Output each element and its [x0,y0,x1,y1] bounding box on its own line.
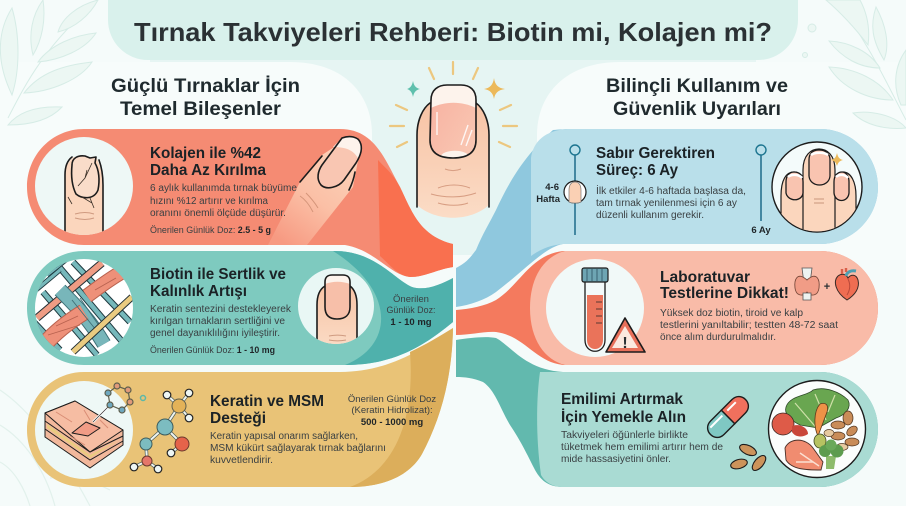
panel: collagen band [27,129,453,277]
band: dose: (Keratin Hidrolizat): [351,405,433,416]
panel: biotin band [27,251,453,365]
band: side dose: Önerilen [393,294,429,305]
icon: test tube [582,268,608,351]
nail [430,85,476,158]
panel: lab band: Testlerine Dikkat! [660,285,789,302]
band: dose: Önerilen Günlük Doz: 1 - 10 mg [150,345,275,356]
band: body: İlk etkiler 4-6 haftada başlasa da, [596,184,746,197]
panel: lab band [456,251,878,365]
panel: food band: mide hassasiyetini önler. [561,454,671,465]
panel: collagen band: hızını %12 artırır ve kırılma [150,196,268,207]
icon: warning triangle: ! [622,335,628,352]
panel: patience band: tam tırnak yenilenmesi için 6 ay [596,198,737,209]
timeline label: 4-6 weeks: 4-6 [545,182,559,193]
panel: keratin band: MSM kükürt sağlayarak tırnak bağlarını [210,443,386,454]
icon: food plate [768,380,866,478]
panel: keratin band [27,328,453,487]
decorative leaves top left [0,0,98,125]
nuts [824,411,859,450]
icon: molecule [130,389,193,473]
panel: keratin band: Desteği [210,410,266,427]
icon: almonds [730,442,768,473]
heading: right column: Bilinçli Kullanım ve [606,76,788,97]
band: dose: Önerilen Günlük Doz [348,394,436,405]
panel: food band: tüketmek hem emilimi artırır hem de [561,442,723,453]
band: body: Takviyeleri öğünlerle birlikte [561,430,688,441]
avocado [814,434,826,448]
timeline: second marker [751,145,771,236]
carrot [815,403,828,436]
greens [786,389,849,428]
panel: biotin band: Kalınlık Artışı [150,283,247,300]
band: dose [348,394,436,428]
finger [417,103,489,218]
band: side dose: Günlük Doz: [386,305,436,316]
heading: left column: Güçlü Tırnaklar İçin [111,76,300,97]
icon: cracked nail [65,156,103,240]
band: body: Keratin sentezini destekleyerek [150,304,292,315]
timeline: first marker [564,145,586,235]
icon: small hexagon molecule [105,383,133,413]
panel: patience band: Süreç: 6 Ay [596,162,678,179]
panel: lab band: önce alım durdurulmalıdır. [660,332,776,343]
heading: left column: Temel Bileşenler [120,99,282,120]
center mint column [150,30,756,255]
band: circle [35,137,133,235]
band: heading: Sabır Gerektiren [596,145,715,162]
band: heading: Biotin ile Sertlik ve [150,266,286,283]
band: dose: 500 - 1000 mg [361,417,423,428]
band: body: 6 aylık kullanımda tırnak büyüme [150,183,297,194]
band: body: Yüksek doz biotin, tiroid ve kalp [660,308,803,319]
salmon [785,440,823,470]
band: circle [35,381,133,479]
band: heading: Kolajen ile %42 [150,145,261,162]
heading: right column [606,76,788,120]
decorative leaves top right [802,0,906,128]
icon: healthy fingers [772,142,862,240]
icon: nail layers [45,401,123,468]
icon: keratin weave [30,255,132,355]
title: Tırnak Takviyeleri Rehberi: Biotin mi, Kolajen mi? [134,17,772,47]
timeline label: 4-6 weeks [536,182,561,205]
panel: patience band [456,129,878,307]
timeline: second marker: 6 Ay [751,225,771,236]
icon: ring bubble [140,396,146,400]
panel: collagen band: oranını önemli ölçüde düşürür. [150,208,286,219]
band: heading: Keratin ve MSM [210,393,324,410]
broccoli [826,456,836,469]
heading: right column: Güvenlik Uyarıları [613,99,781,120]
finger on coral [268,137,361,245]
icon: thyroid [795,268,819,300]
band: side dose [386,294,436,328]
icon: healthy nail [298,268,374,350]
band: side dose: 1 - 10 mg [390,317,432,328]
center nail illustration [390,62,517,218]
panel: food band [456,337,878,487]
knuckle lines [431,169,476,205]
title pill [108,0,798,60]
rays and sparkles [390,62,517,147]
decorative leaves bottom left [0,390,110,506]
band: circle [35,259,133,357]
icon: capsule [704,393,752,441]
panel: lab band: testlerini yanıltabilir; testten 48-72 saat [660,320,838,331]
panel: collagen band: Daha Az Kırılma [150,162,266,179]
panel: patience band: düzenli kullanım gerekir. [596,210,704,221]
band: dose: Önerilen Günlük Doz: 2.5 - 5 g [150,225,271,236]
panel: keratin band: kuvvetlendirir. [210,455,273,466]
decorative left backdrop [0,62,372,260]
heading: left column [111,76,300,120]
tomato [772,413,794,435]
icon: warning triangle [606,318,645,352]
timeline label: 4-6 weeks: Hafta [536,194,561,205]
band: circle [546,259,644,357]
panel: food band: İçin Yemekle Alın [561,408,686,426]
decorative right backdrop [537,62,906,260]
plus sign: + [824,281,830,293]
panel: biotin band: kırılgan tırnakların sertliğini ve [150,316,285,327]
panel: biotin band: genel dayanıklılığını iyileştirir. [150,328,280,339]
band: heading: Emilimi Artırmak [561,391,683,408]
band: heading: Laboratuvar [660,269,750,286]
band: body: Keratin yapısal onarım sağlarken, [210,431,358,442]
icon: heart [835,268,858,300]
